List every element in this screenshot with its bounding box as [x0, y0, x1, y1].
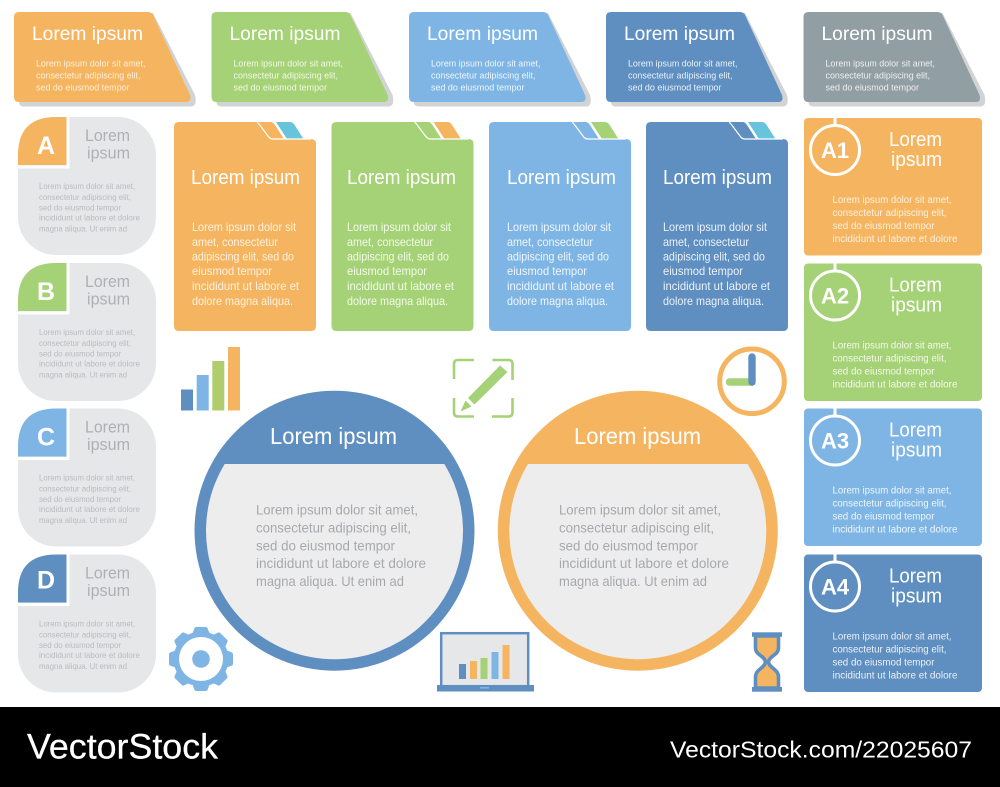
- panel: right card A2: A2: [821, 284, 849, 308]
- icon: bar chart: [181, 347, 240, 410]
- panel: right card A4: Lorem: [889, 566, 942, 588]
- panel: folder orange: incididunt ut labore et: [192, 280, 300, 293]
- panel: top card green: Lorem ipsum dolor sit amet,: [234, 58, 343, 68]
- panel: blue circle: consectetur adipiscing elit,: [256, 520, 411, 536]
- panel: folder light blue: Lorem ipsum: [507, 167, 616, 189]
- panel: folder light blue: [489, 122, 631, 331]
- panel: folder light blue: eiusmod tempor: [507, 265, 587, 278]
- panel: folder orange: Lorem ipsum dolor sit: [192, 221, 297, 234]
- panel: right card A4: ipsum: [891, 586, 942, 608]
- panel: top card grey: sed do eiusmod tempor: [826, 82, 919, 92]
- footer watermark bar: VectorStock: [27, 727, 218, 767]
- panel: top card light blue: Lorem ipsum: [427, 23, 538, 45]
- panel: left card B: ipsum: [87, 290, 130, 308]
- panel: left card C: C: [37, 424, 55, 452]
- panel: left card C: incididunt ut labore et dolore: [39, 504, 140, 514]
- panel: orange circle: [498, 391, 778, 671]
- icon: pencil in frame: [454, 360, 512, 416]
- panel: right card A1: sed do eiusmod tempor: [832, 221, 935, 232]
- panel: folder green: amet, consectetur: [347, 236, 433, 249]
- panel: folder green: eiusmod tempor: [347, 265, 427, 278]
- panel: right card A4: consectetur adipiscing elit,: [832, 644, 946, 656]
- panel: top card orange: Lorem ipsum dolor sit amet,: [36, 58, 146, 68]
- icon: laptop: [437, 633, 534, 692]
- panel: folder light blue: Lorem ipsum dolor sit: [507, 221, 612, 234]
- panel: top card green: sed do eiusmod tempor: [234, 82, 327, 92]
- panel: left card D: Lorem ipsum dolor sit amet,: [39, 618, 135, 628]
- panel: top card grey: consectetur adipiscing elit,: [826, 70, 930, 80]
- panel: left card A: magna aliqua. Ut enim ad: [39, 224, 127, 234]
- panel: right card A2: [804, 264, 982, 401]
- panel: top card green: Lorem ipsum: [230, 23, 340, 45]
- panel: folder orange: dolore magna aliqua.: [192, 295, 293, 308]
- panel: folder blue: amet, consectetur: [663, 236, 749, 249]
- panel: folder green: adipiscing elit, sed do: [347, 250, 449, 264]
- panel: folder orange: adipiscing elit, sed do: [192, 250, 294, 264]
- panel: left card B: sed do eiusmod tempor: [39, 348, 121, 358]
- panel: right card A2: Lorem ipsum dolor sit amet,: [832, 340, 952, 352]
- panel: left card D: Lorem: [85, 564, 130, 582]
- panel: top card blue: Lorem ipsum dolor sit amet,: [628, 58, 738, 68]
- panel: right card A4: incididunt ut labore et dolore: [832, 670, 958, 682]
- panel: right card A1: consectetur adipiscing elit,: [832, 208, 946, 219]
- panel: top card grey: Lorem ipsum dolor sit amet,: [826, 58, 935, 68]
- panel: blue circle: sed do eiusmod tempor: [256, 538, 395, 554]
- panel: right card A2: ipsum: [891, 294, 942, 316]
- panel: left card D: incididunt ut labore et dolore: [39, 650, 140, 660]
- panel: left card C: consectetur adipiscing elit,: [39, 484, 131, 494]
- icon: clock: [720, 349, 784, 414]
- panel: blue circle: magna aliqua. Ut enim ad: [256, 573, 404, 589]
- panel: top card light blue: Lorem ipsum dolor sit amet,: [431, 58, 540, 68]
- footer watermark bar: VectorStock.com/22025607: [670, 736, 972, 762]
- panel: right card A1: ipsum: [891, 149, 942, 171]
- panel: top card blue: [606, 12, 788, 106]
- panel: top card light blue: consectetur adipiscing elit,: [431, 70, 536, 80]
- panel: folder blue: incididunt ut labore et: [663, 280, 771, 293]
- panel: top card orange: Lorem ipsum: [32, 23, 143, 45]
- panel: left card C: Lorem: [85, 418, 130, 436]
- panel: left card A: sed do eiusmod tempor: [39, 202, 121, 212]
- icon: hourglass: [752, 632, 782, 692]
- panel: blue circle: [194, 391, 474, 671]
- panel: folder light blue: adipiscing elit, sed do: [507, 250, 609, 264]
- panel: folder blue: Lorem ipsum dolor sit: [663, 221, 768, 234]
- panel: right card A2: Lorem: [889, 274, 942, 296]
- panel: top card light blue: sed do eiusmod tempor: [431, 82, 524, 92]
- panel: left card C: ipsum: [87, 435, 130, 454]
- panel: left card A: A: [37, 132, 55, 160]
- panel: left card B: Lorem: [85, 272, 130, 291]
- panel: folder green: dolore magna aliqua.: [347, 295, 448, 308]
- panel: left card A: ipsum: [87, 144, 130, 162]
- panel: left card D: D: [37, 566, 55, 594]
- panel: folder green: Lorem ipsum: [347, 167, 456, 189]
- panel: orange circle: Lorem ipsum: [574, 423, 701, 449]
- panel: left card D: [18, 554, 156, 692]
- panel: orange circle: sed do eiusmod tempor: [559, 538, 698, 554]
- panel: top card orange: sed do eiusmod tempor: [36, 82, 130, 92]
- panel: folder orange: eiusmod tempor: [192, 265, 272, 278]
- panel: folder green: [332, 122, 474, 331]
- panel: top card grey: [804, 12, 985, 106]
- panel: folder blue: adipiscing elit, sed do: [663, 250, 765, 264]
- panel: right card A4: Lorem ipsum dolor sit amet,: [832, 632, 952, 642]
- panel: right card A2: consectetur adipiscing elit,: [832, 354, 946, 364]
- panel: top card blue: Lorem ipsum: [624, 23, 735, 45]
- panel: left card A: consectetur adipiscing elit,: [39, 192, 131, 202]
- panel: right card A3: [804, 408, 982, 546]
- panel: right card A1: incididunt ut labore et dolore: [832, 234, 958, 245]
- panel: left card C: magna aliqua. Ut enim ad: [39, 515, 127, 525]
- panel: folder orange: amet, consectetur: [192, 236, 278, 249]
- panel: folder blue: [646, 122, 788, 331]
- panel: right card A3: ipsum: [891, 440, 942, 462]
- panel: folder orange: Lorem ipsum: [191, 167, 300, 189]
- panel: left card B: incididunt ut labore et dolore: [39, 358, 140, 368]
- panel: left card D: ipsum: [87, 581, 130, 600]
- panel: left card A: Lorem: [85, 126, 130, 145]
- panel: top card green: consectetur adipiscing elit,: [234, 70, 338, 80]
- panel: top card orange: [14, 12, 196, 106]
- panel: folder blue: Lorem ipsum: [663, 167, 772, 189]
- panel: right card A3: A3: [821, 428, 849, 454]
- panel: left card C: [18, 408, 156, 546]
- panel: blue circle: incididunt ut labore et dolore: [256, 555, 426, 571]
- panel: folder green: incididunt ut labore et: [347, 280, 455, 293]
- panel: folder light blue: incididunt ut labore et: [507, 280, 615, 293]
- panel: left card B: B: [37, 278, 55, 306]
- panel: right card A3: consectetur adipiscing elit,: [832, 498, 946, 510]
- panel: orange circle: magna aliqua. Ut enim ad: [559, 573, 707, 589]
- panel: left card B: [18, 263, 156, 401]
- panel: right card A2: incididunt ut labore et dolore: [832, 380, 958, 390]
- panel: right card A4: sed do eiusmod tempor: [832, 658, 935, 668]
- panel: right card A1: A1: [821, 138, 849, 163]
- panel: top card green: [212, 12, 393, 106]
- panel: folder light blue: dolore magna aliqua.: [507, 295, 608, 308]
- panel: blue circle: Lorem ipsum: [270, 423, 397, 449]
- panel: top card light blue: [409, 12, 591, 106]
- panel: right card A3: Lorem: [889, 420, 942, 442]
- panel: top card blue: sed do eiusmod tempor: [628, 82, 722, 92]
- panel: left card C: Lorem ipsum dolor sit amet,: [39, 472, 135, 482]
- panel: left card D: consectetur adipiscing elit,: [39, 630, 131, 640]
- panel: folder blue: dolore magna aliqua.: [663, 295, 764, 308]
- panel: top card grey: Lorem ipsum: [822, 23, 932, 45]
- panel: right card A4: [804, 554, 982, 692]
- icon: gear: [169, 627, 233, 691]
- panel: top card orange: consectetur adipiscing elit,: [36, 70, 140, 80]
- panel: right card A1: Lorem ipsum dolor sit amet,: [832, 195, 952, 206]
- panel: right card A3: Lorem ipsum dolor sit amet,: [832, 486, 952, 496]
- panel: left card B: consectetur adipiscing elit,: [39, 338, 131, 348]
- panel: left card D: magna aliqua. Ut enim ad: [39, 661, 127, 671]
- panel: top card blue: consectetur adipiscing elit,: [628, 70, 732, 80]
- panel: folder green: Lorem ipsum dolor sit: [347, 221, 452, 234]
- panel: right card A1: Lorem: [889, 129, 942, 151]
- panel: left card A: [18, 117, 156, 255]
- panel: right card A1: [804, 118, 982, 256]
- panel: folder light blue: amet, consectetur: [507, 236, 593, 249]
- panel: right card A4: A4: [821, 574, 850, 600]
- panel: blue circle: Lorem ipsum dolor sit amet,: [256, 502, 418, 518]
- panel: left card B: Lorem ipsum dolor sit amet,: [39, 327, 135, 337]
- panel: left card C: sed do eiusmod tempor: [39, 494, 121, 504]
- panel: right card A2: sed do eiusmod tempor: [832, 366, 935, 378]
- footer watermark bar: [0, 707, 1000, 787]
- panel: folder orange: [174, 122, 316, 331]
- panel: orange circle: incididunt ut labore et dolore: [559, 555, 729, 571]
- panel: left card D: sed do eiusmod tempor: [39, 640, 121, 650]
- panel: right card A3: sed do eiusmod tempor: [832, 512, 935, 522]
- panel: orange circle: consectetur adipiscing elit,: [559, 520, 714, 536]
- panel: orange circle: Lorem ipsum dolor sit amet,: [559, 502, 721, 518]
- panel: left card A: incididunt ut labore et dolore: [39, 212, 140, 222]
- panel: left card B: magna aliqua. Ut enim ad: [39, 370, 127, 380]
- panel: folder blue: eiusmod tempor: [663, 265, 743, 278]
- panel: right card A3: incididunt ut labore et dolore: [832, 524, 958, 536]
- panel: left card A: Lorem ipsum dolor sit amet,: [39, 181, 135, 191]
